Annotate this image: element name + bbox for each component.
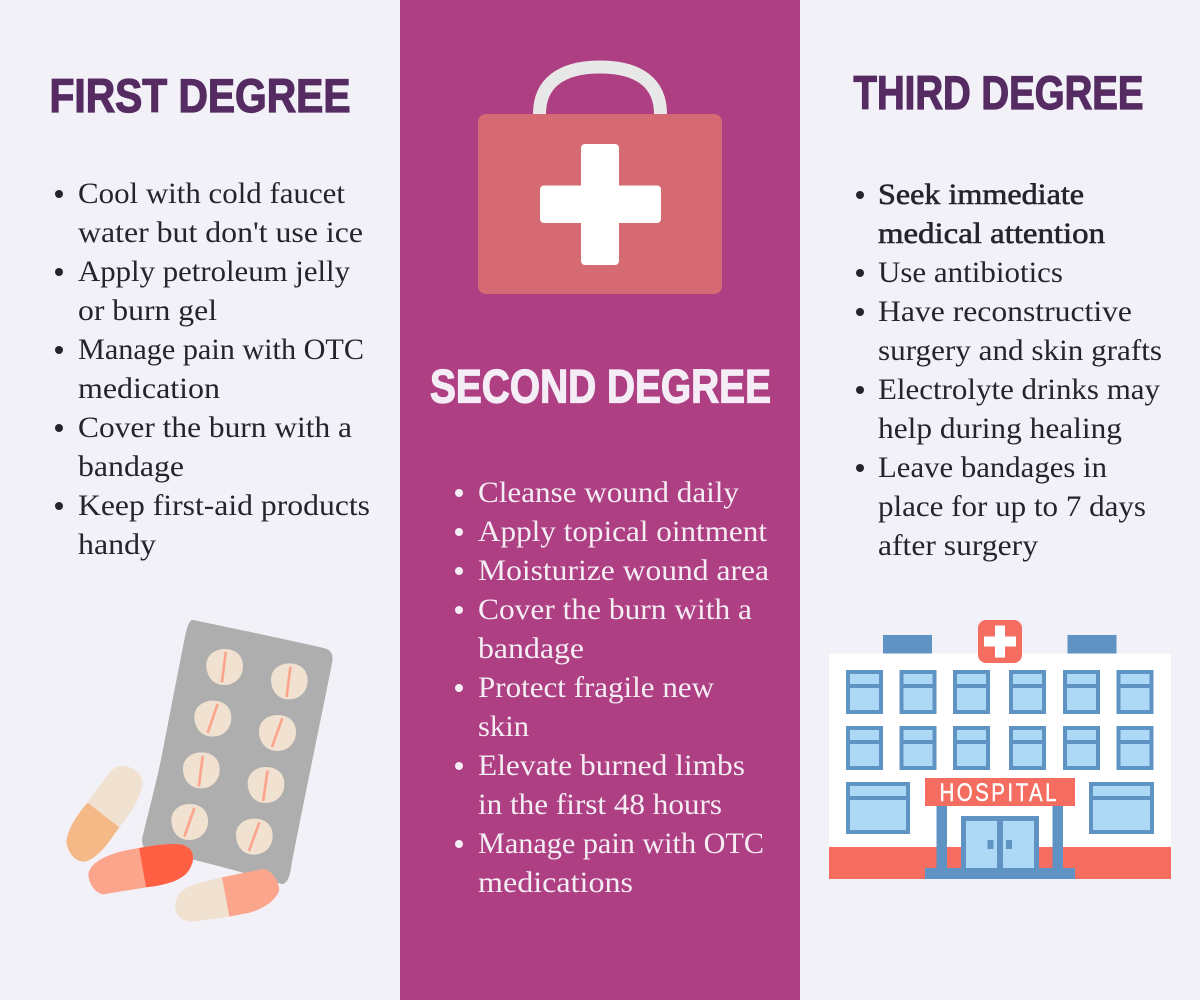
text block: second degree steps: skin: [478, 711, 529, 743]
text block: third degree steps: medical attention: [878, 218, 1105, 250]
heading: second degree: SECOND DEGREE: [430, 360, 771, 412]
capsule: salmon and red: [88, 848, 146, 894]
text block: second degree steps: Apply topical ointment: [478, 516, 768, 548]
text block: third degree steps: [856, 179, 1162, 562]
text block: first degree steps: [55, 178, 370, 561]
tablet score lines: [185, 653, 290, 850]
text block: third degree steps: after surgery: [878, 530, 1038, 562]
text block: first degree steps: bandage: [78, 451, 184, 483]
text block: second degree steps: [455, 477, 769, 899]
text block: second degree steps: Cleanse wound daily: [478, 477, 739, 509]
text block: second degree steps: Cover the burn with a: [478, 594, 752, 626]
text block: first degree steps: Manage pain with OTC: [78, 334, 364, 366]
text block: second degree steps: medications: [478, 867, 633, 899]
text block: first degree steps: water but don't use ice: [78, 217, 363, 249]
tablets: [171, 649, 308, 855]
text block: second degree steps: Manage pain with OTC: [478, 828, 764, 860]
text block: second degree steps: Moisturize wound area: [478, 555, 769, 587]
capsule: beige and salmon: [175, 877, 229, 922]
text block: second degree steps: in the first 48 hours: [478, 789, 722, 821]
text block: first degree steps: medication: [78, 373, 220, 405]
text block: third degree steps: place for up to 7 days: [878, 491, 1146, 523]
upper windows: [848, 672, 1152, 832]
icon: hospital building: [829, 620, 1171, 879]
capsule: beige and orange: [88, 766, 142, 827]
text block: third degree steps: Electrolyte drinks may: [878, 374, 1160, 406]
heading: first degree: FIRST DEGREE: [50, 69, 350, 122]
text block: first degree steps: Keep first-aid products: [78, 490, 370, 522]
heading: third degree: THIRD DEGREE: [854, 66, 1144, 119]
hospital sign: [925, 778, 1075, 806]
text block: third degree steps: Seek immediate: [878, 179, 1084, 211]
text block: first degree steps: Apply petroleum jelly: [78, 256, 350, 288]
panel: second degree background: [400, 0, 800, 1000]
text block: third degree steps: Use antibiotics: [878, 257, 1063, 289]
blister pack: [142, 620, 333, 884]
text block: first degree steps: or burn gel: [78, 295, 217, 327]
text block: third degree steps: Leave bandages in: [878, 452, 1107, 484]
text block: third degree steps: Have reconstructive: [878, 296, 1132, 328]
text block: third degree steps: help during healing: [878, 413, 1122, 445]
icon: hospital building: HOSPITAL: [940, 778, 1059, 806]
text block: second degree steps: Elevate burned limbs: [478, 750, 745, 782]
icon: first aid kit: [478, 67, 722, 294]
text block: first degree steps: Cool with cold faucet: [78, 178, 346, 210]
entrance: [936, 806, 947, 869]
text block: second degree steps: bandage: [478, 633, 584, 665]
text block: second degree steps: Protect fragile new: [478, 672, 715, 704]
text block: first degree steps: Cover the burn with a: [78, 412, 352, 444]
icon: pills and blister pack: [66, 620, 333, 922]
text block: first degree steps: handy: [78, 529, 156, 561]
text block: third degree steps: surgery and skin grafts: [878, 335, 1162, 367]
rooftop cross sign: [978, 620, 1022, 663]
